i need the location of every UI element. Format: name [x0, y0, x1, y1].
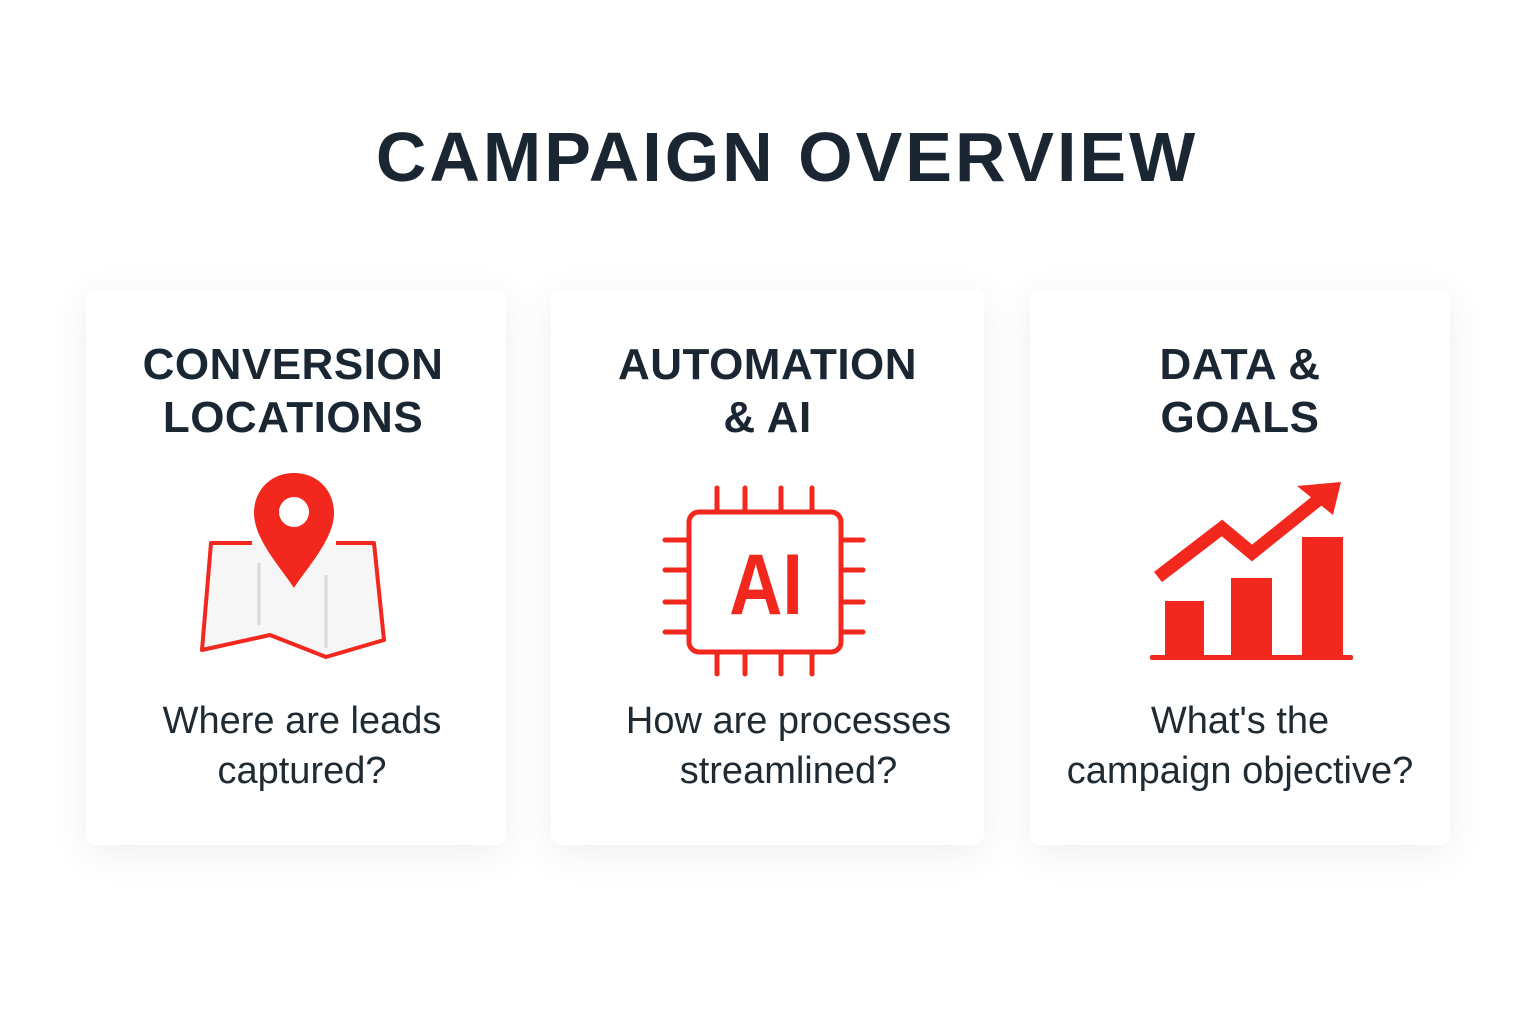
heading: data & goals: DATA & — [1159, 340, 1321, 389]
panel: data & goals — [1030, 290, 1450, 845]
title: CAMPAIGN OVERVIEW — [376, 118, 1198, 196]
icon: bar chart with arrow — [1150, 482, 1353, 660]
heading: conversion locations: CONVERSION — [143, 340, 443, 389]
heading: automation: & AI — [723, 393, 812, 442]
icon: map pin — [202, 473, 384, 657]
question: objective: What's the — [1151, 700, 1329, 742]
heading: conversion locations — [143, 340, 443, 442]
question: leads: Where are leads — [163, 700, 441, 742]
question: processes — [626, 700, 951, 792]
heading: data & goals — [1159, 340, 1321, 442]
icon: AI chip: AI — [729, 536, 803, 632]
question: processes: How are processes — [626, 700, 951, 742]
question: leads: captured? — [217, 750, 386, 792]
question: objective — [1067, 700, 1413, 792]
heading: conversion locations: LOCATIONS — [163, 393, 423, 442]
question: processes: streamlined? — [680, 750, 897, 792]
heading: automation: AUTOMATION — [618, 340, 917, 389]
icon: AI chip — [665, 488, 863, 674]
question: leads — [162, 700, 441, 792]
question: objective: campaign objective? — [1067, 750, 1413, 792]
panel: automation & AI — [551, 290, 984, 845]
panel: conversion locations — [86, 290, 506, 845]
heading: automation — [618, 340, 917, 442]
heading: data & goals: GOALS — [1161, 393, 1319, 442]
